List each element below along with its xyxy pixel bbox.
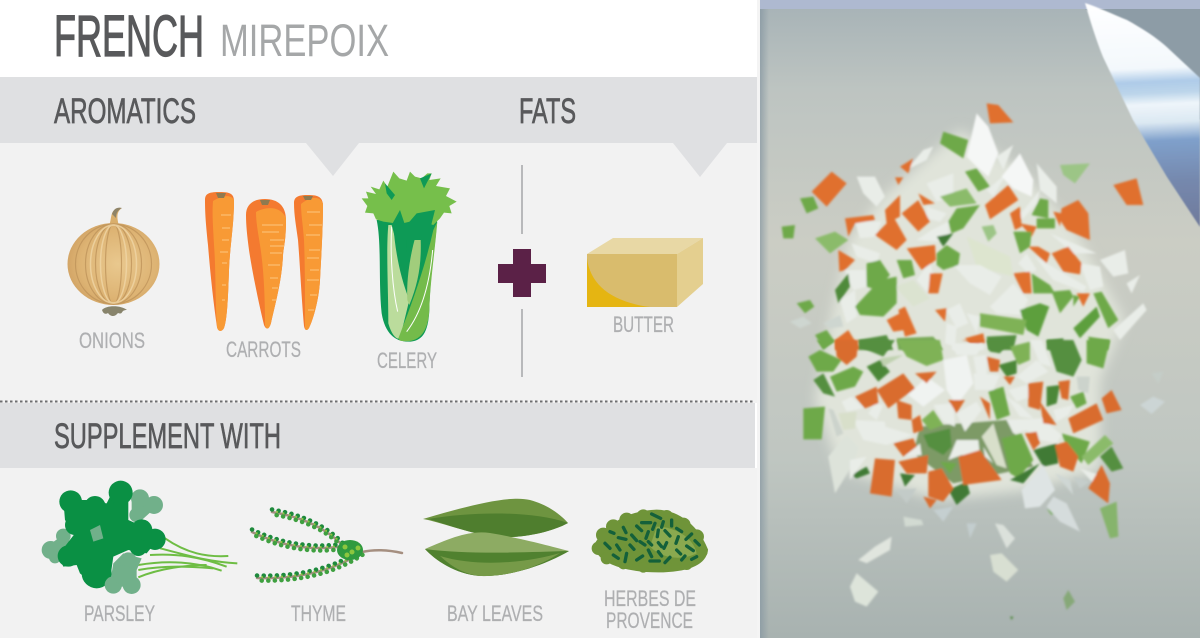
- label: bay leaves: BAY LEAVES: [447, 601, 543, 626]
- icon: butter: [587, 238, 703, 307]
- label: parsley: PARSLEY: [84, 601, 155, 626]
- panel: aromatics and fats header band: [0, 77, 757, 177]
- divider: upper vertical rule: [521, 165, 523, 234]
- panel: supplement ingredient panel: [0, 468, 757, 638]
- label: herbes de provence: [604, 586, 696, 633]
- shaded gaps lower: [913, 420, 1033, 483]
- icon: celery: [362, 172, 457, 342]
- pile: lower half: [803, 340, 1165, 620]
- label: carrots: CARROTS: [226, 337, 301, 362]
- pile base: [815, 130, 1125, 500]
- label: herbes de provence: PROVENCE: [606, 608, 693, 633]
- icon: onion: [68, 208, 160, 316]
- carrot 2: [246, 199, 286, 329]
- label: thyme: THYME: [291, 601, 346, 626]
- pile: upper half: [782, 103, 1147, 350]
- label: herbes de provence: HERBES DE: [604, 586, 696, 611]
- carrot 1: [205, 192, 234, 331]
- icon: carrots: [205, 192, 323, 331]
- divider: lower vertical rule: [521, 309, 523, 377]
- carrot 3: [294, 195, 323, 330]
- icon: thyme: [252, 510, 402, 581]
- icon: plus sign: [498, 249, 546, 297]
- label: butter: BUTTER: [613, 312, 674, 337]
- icon: herbes de provence: [592, 509, 708, 573]
- celery pieces upper: [782, 132, 1118, 350]
- label: onions: ONIONS: [79, 328, 145, 353]
- icon: bay leaves: [423, 499, 569, 576]
- title: FRENCH: [54, 4, 204, 69]
- heading: aromatics: AROMATICS: [54, 92, 196, 131]
- heading: supplement with: SUPPLEMENT WITH: [54, 417, 281, 456]
- label: celery: CELERY: [377, 348, 437, 373]
- title: MIREPOIX: [220, 15, 389, 66]
- photo: chopped mirepoix on cutting board: [757, 0, 1200, 638]
- onion pieces lower: [828, 340, 1165, 607]
- knife blade: [1085, 3, 1200, 227]
- celery pieces lower: [803, 340, 1123, 620]
- carrot pieces upper: [812, 103, 1143, 350]
- divider: dotted rule: [0, 400, 755, 402]
- onion pieces upper: [790, 113, 1147, 350]
- icon: parsley: [42, 481, 237, 594]
- carrot pieces lower: [835, 340, 1122, 508]
- heading: fats: FATS: [519, 92, 576, 131]
- panel: upper ingredient panel: [0, 143, 757, 403]
- panel: supplement header band: [0, 403, 755, 468]
